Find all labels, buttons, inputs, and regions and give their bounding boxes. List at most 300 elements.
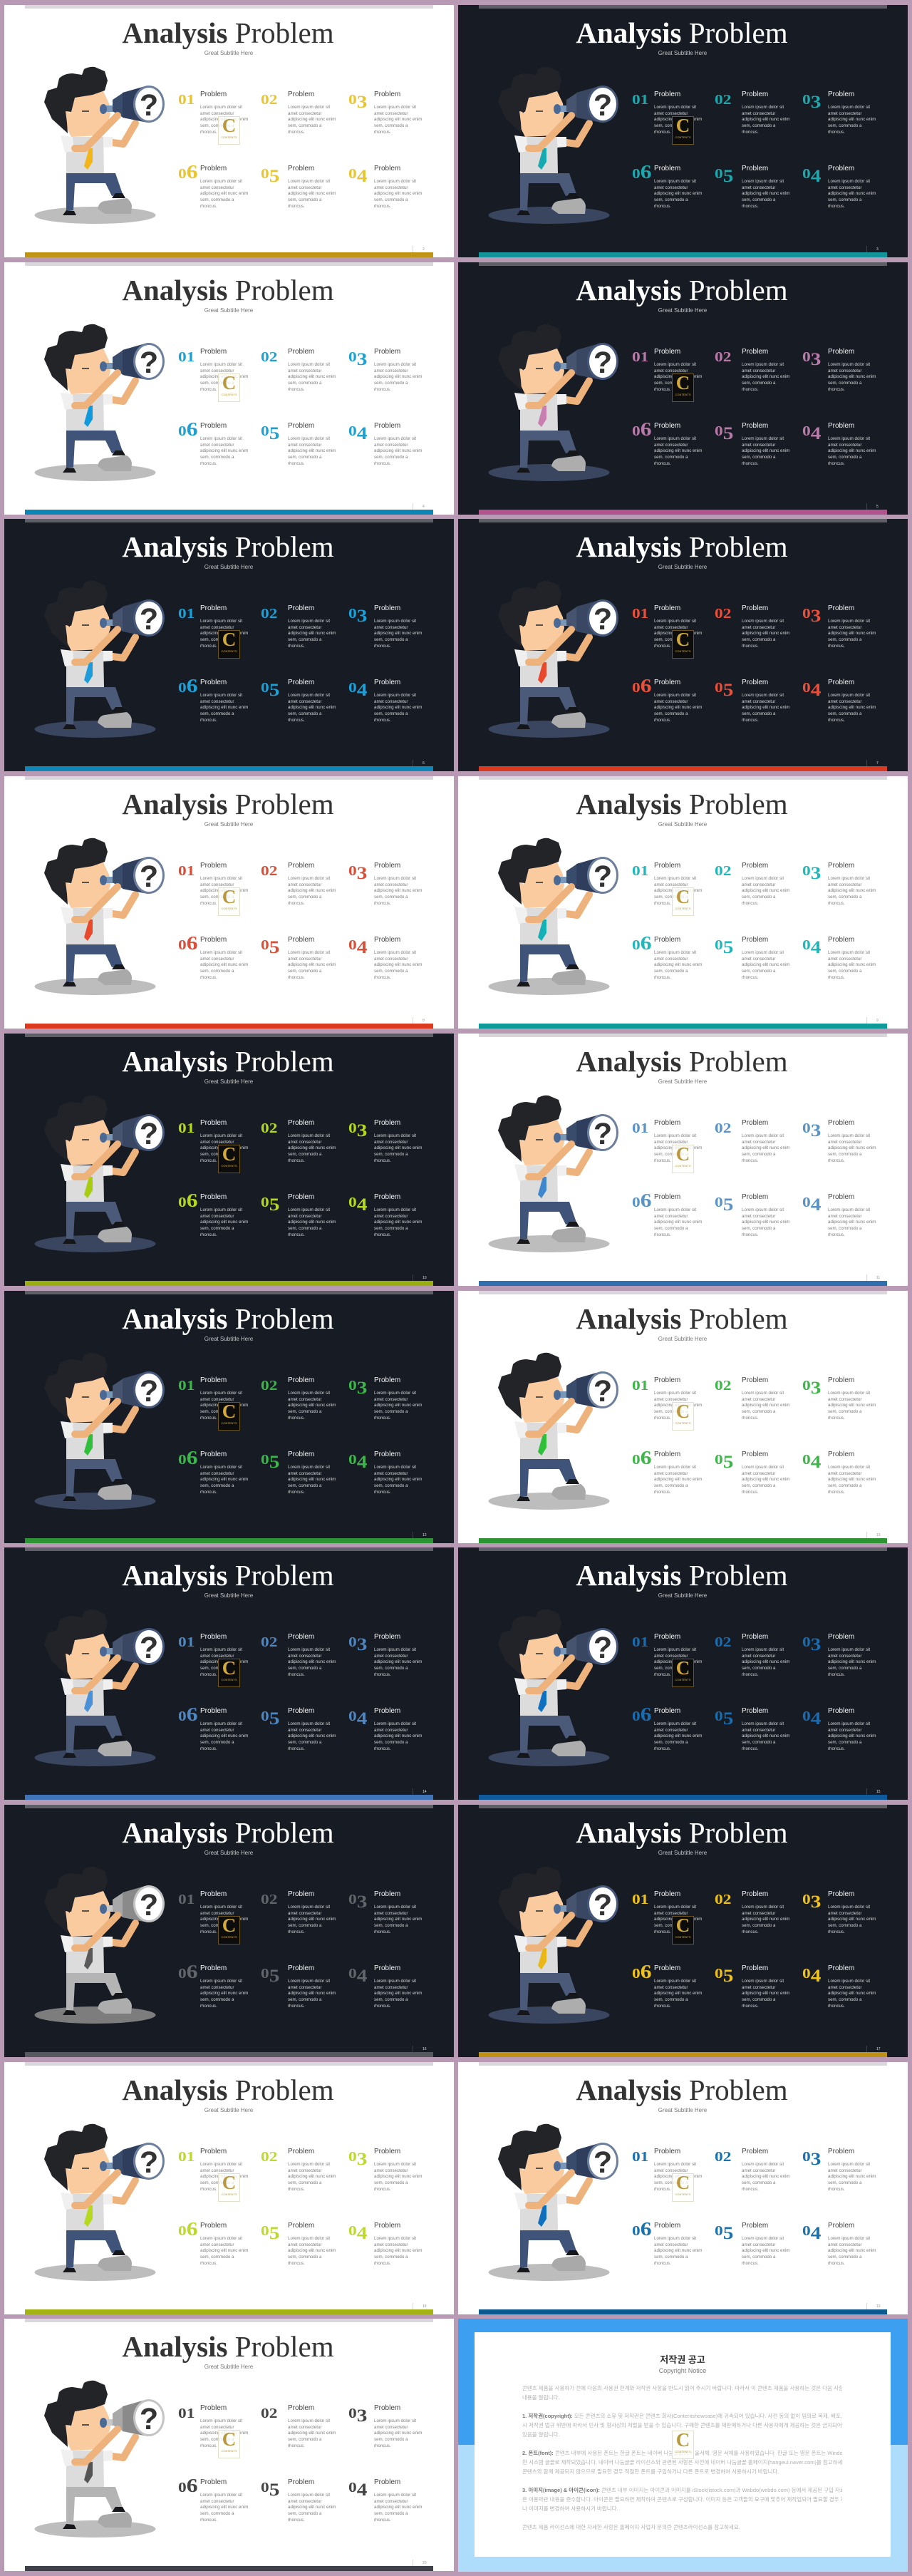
slide 5: dark pink [458, 262, 908, 515]
item 06: rhoncus. [654, 2261, 671, 2266]
item 03: Lorem ipsum dolor sit [828, 105, 870, 110]
item 04 [802, 2222, 884, 2272]
item 05: sem, commodo a [288, 711, 321, 716]
item 03: Problem [374, 1890, 400, 1898]
item 06: adipiscing elit nunc enim [654, 191, 702, 196]
item 03: 03 [348, 863, 367, 883]
watermark badge: CONTENTS [675, 1678, 691, 1681]
item 06: adipiscing elit nunc enim [200, 705, 248, 710]
accent bar [479, 1538, 887, 1543]
item 05: Problem [742, 1451, 768, 1458]
item 01: 01 [178, 606, 195, 622]
page number: 3 [876, 247, 879, 252]
item 03: amet consectetur [374, 1911, 408, 1916]
item 01: rhoncus. [200, 387, 217, 392]
item 05: rhoncus. [742, 975, 759, 980]
item 02: amet consectetur [742, 1140, 775, 1145]
item 02: Lorem ipsum dolor sit [288, 362, 330, 367]
slide 16: dark grey [4, 1805, 454, 2057]
item 04: rhoncus. [374, 718, 391, 723]
item 03 [348, 348, 422, 392]
item 04 [802, 1451, 884, 1500]
item 02: Lorem ipsum dolor sit [288, 1905, 330, 1910]
item 01: Problem [200, 2404, 227, 2412]
item 01: Lorem ipsum dolor sit [654, 1647, 696, 1652]
subtitle: Great Subtitle Here [658, 564, 707, 570]
item 04 [802, 1964, 884, 2014]
item 05 [715, 1964, 797, 2014]
item 04: amet consectetur [374, 957, 408, 962]
item 01: 01 [178, 2149, 195, 2165]
item 05: adipiscing elit nunc enim [742, 1477, 789, 1482]
item 02: sem, commodo a [742, 123, 775, 128]
item 05: sem, commodo a [288, 2255, 321, 2260]
accent bar [479, 2052, 887, 2057]
item 04: Lorem ipsum dolor sit [374, 1465, 416, 1470]
item 03: Problem [374, 2148, 400, 2155]
item 04: rhoncus. [828, 2004, 845, 2009]
item 01: adipiscing elit nunc enim [654, 1403, 702, 1408]
accent bar [25, 766, 433, 771]
page number [413, 1532, 435, 1539]
item 06: rhoncus. [654, 1746, 671, 1751]
item 04: amet consectetur [374, 1471, 408, 1476]
illustration: man with telescope [458, 776, 629, 1004]
item 02: Problem [288, 91, 314, 98]
accent bar [25, 1795, 433, 1800]
item 06 [178, 1193, 260, 1243]
illustration: man with telescope [458, 519, 629, 747]
item 02: adipiscing elit nunc enim [742, 1145, 789, 1150]
item 06: Lorem ipsum dolor sit [200, 179, 242, 184]
item 06: 06 [178, 932, 197, 954]
item 01: Problem [654, 862, 680, 870]
item 06: rhoncus. [200, 2004, 217, 2009]
item 06 [632, 936, 714, 986]
item 03: Problem [828, 1633, 854, 1641]
item 04: amet consectetur [374, 1985, 408, 1990]
item 05: adipiscing elit nunc enim [288, 2248, 336, 2253]
item 01: rhoncus. [200, 1672, 217, 1677]
item 03: 03 [802, 1634, 821, 1654]
item 05: rhoncus. [288, 204, 305, 209]
item 05: amet consectetur [288, 443, 321, 448]
item 05: rhoncus. [288, 461, 305, 466]
item 05: rhoncus. [742, 461, 759, 466]
illustration: man with telescope [458, 2062, 629, 2290]
item 02: sem, commodo a [742, 637, 775, 642]
item 01: adipiscing elit nunc enim [200, 2174, 248, 2179]
item 05: Lorem ipsum dolor sit [742, 1465, 784, 1470]
item 02 [715, 862, 797, 912]
item 04: Problem [828, 422, 854, 430]
item 05: 05 [261, 423, 279, 443]
item 01: rhoncus. [654, 1158, 671, 1163]
item 06: Lorem ipsum dolor sit [654, 1465, 696, 1470]
item 03: 03 [802, 1120, 821, 1140]
item 05: Problem [288, 936, 314, 944]
watermark badge [218, 2430, 240, 2458]
item 03: sem, commodo a [374, 637, 408, 642]
item 03: rhoncus. [374, 2443, 391, 2448]
item 02: sem, commodo a [288, 637, 321, 642]
item 02: adipiscing elit nunc enim [288, 2174, 336, 2179]
item 04 [802, 165, 876, 209]
page number [866, 2046, 888, 2053]
item 05: adipiscing elit nunc enim [742, 191, 789, 196]
item 01: rhoncus. [200, 2443, 217, 2448]
item 05: 05 [261, 2480, 279, 2500]
item 01: Problem [200, 1119, 227, 1127]
item 05: sem, commodo a [742, 2255, 775, 2260]
item 02: 02 [261, 1120, 277, 1136]
item 02 [715, 1633, 797, 1683]
item 06: adipiscing elit nunc enim [200, 962, 248, 967]
item 06: 06 [178, 1704, 197, 1725]
item 04: sem, commodo a [828, 2255, 861, 2260]
item 06 [632, 1451, 714, 1500]
item 05: rhoncus. [742, 204, 759, 209]
title: Analysis Problem [576, 788, 788, 820]
item 04: sem, commodo a [374, 711, 408, 716]
item 05: amet consectetur [288, 2242, 321, 2247]
item 06: amet consectetur [200, 1214, 234, 1219]
item 05: adipiscing elit nunc enim [288, 1733, 336, 1738]
item 02: 02 [261, 863, 277, 879]
item 02: 02 [715, 2149, 731, 2165]
item 06: Problem [654, 679, 680, 686]
item 02 [261, 1376, 343, 1426]
item 01 [178, 1633, 260, 1683]
item 06: Lorem ipsum dolor sit [654, 179, 696, 184]
item 02: Lorem ipsum dolor sit [742, 1905, 784, 1910]
item 03: amet consectetur [374, 625, 408, 630]
item 03: rhoncus. [828, 1672, 845, 1677]
item 02: amet consectetur [288, 1140, 321, 1145]
item 04: sem, commodo a [374, 969, 408, 974]
item 06: sem, commodo a [654, 1740, 688, 1745]
item 03: Lorem ipsum dolor sit [374, 1391, 416, 1396]
slide 2: white gold [4, 5, 454, 257]
copyright body text: 콘텐츠와 함께 제공되지 않으므로 필요한 경우 적절한 폰트를 구입하거나 다른 폰트로 변경하여 사용하시기 바랍니다. [522, 2468, 779, 2475]
page number: 2 [423, 247, 425, 252]
title: Analysis Problem [576, 1816, 788, 1849]
item 01: amet consectetur [654, 1140, 688, 1145]
item 02: rhoncus. [288, 1672, 305, 1677]
item 01: sem, commodo a [200, 123, 234, 128]
item 03: sem, commodo a [374, 895, 408, 900]
item 04: Lorem ipsum dolor sit [374, 1721, 416, 1726]
item 06: 06 [632, 2218, 651, 2240]
item 06: 06 [632, 1190, 651, 1211]
item 06: rhoncus. [200, 975, 217, 980]
watermark badge [672, 1402, 694, 1431]
item 01: sem, commodo a [200, 1409, 234, 1414]
item 03: Lorem ipsum dolor sit [374, 619, 416, 624]
item 01 [178, 91, 248, 135]
item 06: amet consectetur [200, 957, 234, 962]
item 03: sem, commodo a [828, 895, 861, 900]
item 05: Problem [742, 2222, 768, 2230]
watermark badge [218, 2173, 240, 2202]
item 02: 02 [261, 1378, 277, 1393]
item 02: rhoncus. [742, 1672, 759, 1677]
item 02: Problem [288, 2404, 314, 2412]
item 06: adipiscing elit nunc enim [654, 1220, 702, 1225]
item 03: 03 [802, 1892, 821, 1912]
item 02: rhoncus. [288, 1158, 305, 1163]
item 05: adipiscing elit nunc enim [288, 1477, 336, 1482]
item 02: rhoncus. [742, 130, 759, 135]
item 03 [802, 862, 884, 912]
copyright body text: 내용을 알립니다. [522, 2394, 559, 2401]
item 04: adipiscing elit nunc enim [828, 191, 876, 196]
title: Analysis Problem [122, 1302, 334, 1335]
item 05: amet consectetur [742, 1214, 775, 1219]
slide 19: white navy [458, 2062, 908, 2314]
item 03: Problem [828, 1376, 854, 1384]
item 04: Problem [374, 1451, 400, 1458]
item 05: amet consectetur [742, 1985, 775, 1990]
item 05: sem, commodo a [742, 1740, 775, 1745]
item 03: rhoncus. [828, 1158, 845, 1163]
item 04: Lorem ipsum dolor sit [374, 436, 416, 441]
item 01: Problem [654, 348, 680, 356]
item 02: Problem [742, 604, 768, 612]
item 02: amet consectetur [288, 2425, 321, 2430]
illustration: man with telescope [458, 1291, 629, 1519]
item 01: rhoncus. [654, 1930, 671, 1934]
item 01: adipiscing elit nunc enim [200, 1659, 248, 1664]
watermark badge [672, 1916, 694, 1944]
item 04: Problem [828, 165, 854, 172]
item 04: Problem [374, 679, 400, 686]
item 02: Problem [288, 2148, 314, 2155]
item 03: 03 [348, 2406, 367, 2426]
item 01: Problem [654, 604, 680, 612]
item 01: amet consectetur [200, 1654, 234, 1659]
item 04: adipiscing elit nunc enim [828, 1991, 876, 1996]
item 02: rhoncus. [742, 387, 759, 392]
item 01: Problem [200, 1633, 227, 1641]
item 06: adipiscing elit nunc enim [654, 2248, 702, 2253]
subtitle: Great Subtitle Here [204, 1592, 253, 1599]
item 04: 04 [802, 1452, 821, 1472]
item 05: adipiscing elit nunc enim [288, 2505, 336, 2510]
item 01: adipiscing elit nunc enim [654, 888, 702, 893]
item 03: 03 [348, 92, 367, 112]
item 03: sem, commodo a [374, 1409, 408, 1414]
item 04: sem, commodo a [374, 2255, 408, 2260]
item 04: adipiscing elit nunc enim [828, 962, 876, 967]
item 03: Problem [828, 348, 854, 356]
item 06: Lorem ipsum dolor sit [200, 2493, 242, 2498]
item 03: adipiscing elit nunc enim [374, 1917, 422, 1922]
item 01: Problem [654, 2148, 680, 2155]
item 01: amet consectetur [654, 111, 688, 116]
item 06: Problem [654, 1451, 680, 1458]
item 06: rhoncus. [200, 204, 217, 209]
item 04: sem, commodo a [374, 2511, 408, 2516]
item 01: rhoncus. [200, 1416, 217, 1421]
item 03: Lorem ipsum dolor sit [828, 1647, 870, 1652]
item 02: sem, commodo a [742, 1409, 775, 1414]
item 05: Problem [742, 1964, 768, 1972]
item 06: rhoncus. [200, 1232, 217, 1237]
item 03: sem, commodo a [374, 123, 408, 128]
accent bar [25, 2566, 433, 2571]
illustration: man with telescope [458, 1547, 629, 1776]
subtitle: Great Subtitle Here [204, 2107, 253, 2113]
item 01: 01 [632, 1892, 648, 1907]
item 05: Lorem ipsum dolor sit [742, 436, 784, 441]
item 05: amet consectetur [742, 185, 775, 190]
illustration: man with telescope [4, 2062, 175, 2290]
item 05: rhoncus. [742, 1232, 759, 1237]
item 04 [348, 2478, 430, 2528]
subtitle: Great Subtitle Here [658, 50, 707, 56]
item 06: rhoncus. [200, 461, 217, 466]
item 03: adipiscing elit nunc enim [828, 1403, 876, 1408]
item 06: amet consectetur [200, 2499, 234, 2504]
page number: 5 [876, 505, 879, 509]
item 04: amet consectetur [828, 1214, 861, 1219]
item 06: Lorem ipsum dolor sit [654, 1979, 696, 1984]
item 04: rhoncus. [828, 461, 845, 466]
item 01: 01 [632, 1634, 648, 1650]
item 02: Problem [742, 348, 768, 356]
illustration: man with telescope [489, 67, 618, 224]
item 04: Problem [828, 1707, 854, 1715]
item 06: amet consectetur [654, 957, 688, 962]
item 03: Lorem ipsum dolor sit [828, 2162, 870, 2167]
item 04: rhoncus. [374, 1490, 391, 1495]
item 01 [632, 348, 702, 392]
item 05 [261, 679, 336, 723]
item 04: amet consectetur [374, 2499, 408, 2504]
item 03: rhoncus. [828, 644, 845, 649]
item 04: sem, commodo a [374, 1226, 408, 1231]
watermark badge: CONTENTS [221, 393, 237, 396]
item 06: Problem [654, 1193, 680, 1201]
item 06: rhoncus. [200, 2518, 217, 2523]
item 05: adipiscing elit nunc enim [742, 2248, 789, 2253]
item 03: Problem [374, 348, 400, 356]
item 05 [261, 422, 336, 466]
item 01: 01 [178, 1120, 195, 1136]
accent bar [479, 1024, 887, 1029]
item 02: rhoncus. [288, 1930, 305, 1934]
item 05 [715, 1193, 797, 1243]
item 03: amet consectetur [374, 2168, 408, 2173]
item 06: sem, commodo a [200, 1997, 234, 2002]
item 02: rhoncus. [742, 1930, 759, 1934]
subtitle: Great Subtitle Here [204, 821, 253, 828]
item 04: sem, commodo a [828, 969, 861, 974]
item 03: Lorem ipsum dolor sit [374, 1905, 416, 1910]
page number [413, 1274, 435, 1282]
item 06 [178, 418, 248, 466]
item 02: Problem [288, 862, 314, 870]
item 06: 06 [632, 418, 651, 440]
item 01: sem, commodo a [200, 1923, 234, 1928]
item 02: Problem [742, 1119, 768, 1127]
item 01: amet consectetur [200, 625, 234, 630]
item 05: adipiscing elit nunc enim [742, 1733, 789, 1738]
item 04: Lorem ipsum dolor sit [374, 2236, 416, 2241]
item 03: Lorem ipsum dolor sit [374, 1133, 416, 1138]
item 05: amet consectetur [288, 1471, 321, 1476]
item 03: rhoncus. [828, 901, 845, 906]
item 01: Lorem ipsum dolor sit [200, 619, 242, 624]
subtitle: Great Subtitle Here [658, 1592, 707, 1599]
item 03: sem, commodo a [828, 123, 861, 128]
watermark badge [672, 116, 694, 145]
item 01: adipiscing elit nunc enim [654, 1917, 702, 1922]
item 03 [348, 1119, 430, 1169]
item 02: rhoncus. [742, 1158, 759, 1163]
item 03 [348, 1633, 430, 1683]
item 02 [715, 1890, 797, 1940]
item 06: sem, commodo a [654, 455, 688, 460]
item 02: sem, commodo a [288, 123, 321, 128]
page number: 10 [423, 1276, 427, 1280]
item 06: rhoncus. [654, 1490, 671, 1495]
item 02: amet consectetur [288, 1654, 321, 1659]
item 01: adipiscing elit nunc enim [200, 117, 248, 122]
item 05: Lorem ipsum dolor sit [742, 1207, 784, 1212]
page number [413, 1788, 435, 1796]
item 03 [348, 862, 430, 912]
item 01: Lorem ipsum dolor sit [200, 1391, 242, 1396]
item 03: Problem [828, 862, 854, 870]
item 06: Lorem ipsum dolor sit [654, 2236, 696, 2241]
watermark badge [672, 887, 694, 916]
item 01: Problem [654, 91, 680, 98]
item 01: 01 [178, 863, 195, 879]
item 01: sem, commodo a [654, 123, 688, 128]
item 01: adipiscing elit nunc enim [200, 631, 248, 636]
slide 10: dark lime [4, 1034, 454, 1286]
title: Analysis Problem [122, 1045, 334, 1078]
illustration: man with telescope [458, 1034, 629, 1262]
item 03: 03 [348, 606, 367, 626]
item 05: adipiscing elit nunc enim [288, 1991, 336, 1996]
item 03 [348, 1376, 430, 1426]
page number: 16 [423, 2047, 427, 2051]
item 01: Lorem ipsum dolor sit [200, 1905, 242, 1910]
watermark badge: CONTENTS [675, 649, 691, 653]
item 06 [178, 2222, 260, 2272]
watermark badge: CONTENTS [221, 2193, 237, 2196]
item 05: sem, commodo a [288, 969, 321, 974]
item 03: Lorem ipsum dolor sit [374, 105, 416, 110]
watermark badge: CONTENTS [221, 2449, 237, 2453]
item 05: rhoncus. [742, 2261, 759, 2266]
item 03: adipiscing elit nunc enim [374, 1403, 422, 1408]
item 02: sem, commodo a [288, 381, 321, 386]
item 02: Problem [288, 1890, 314, 1898]
watermark badge [672, 373, 694, 402]
item 06: Lorem ipsum dolor sit [654, 1207, 696, 1212]
item 02: 02 [261, 2149, 277, 2165]
item 06: amet consectetur [200, 2242, 234, 2247]
item 01: sem, commodo a [654, 381, 688, 386]
item 01: rhoncus. [200, 901, 217, 906]
item 03: 03 [802, 863, 821, 883]
item 06: amet consectetur [200, 699, 234, 704]
item 04: Lorem ipsum dolor sit [828, 693, 870, 698]
